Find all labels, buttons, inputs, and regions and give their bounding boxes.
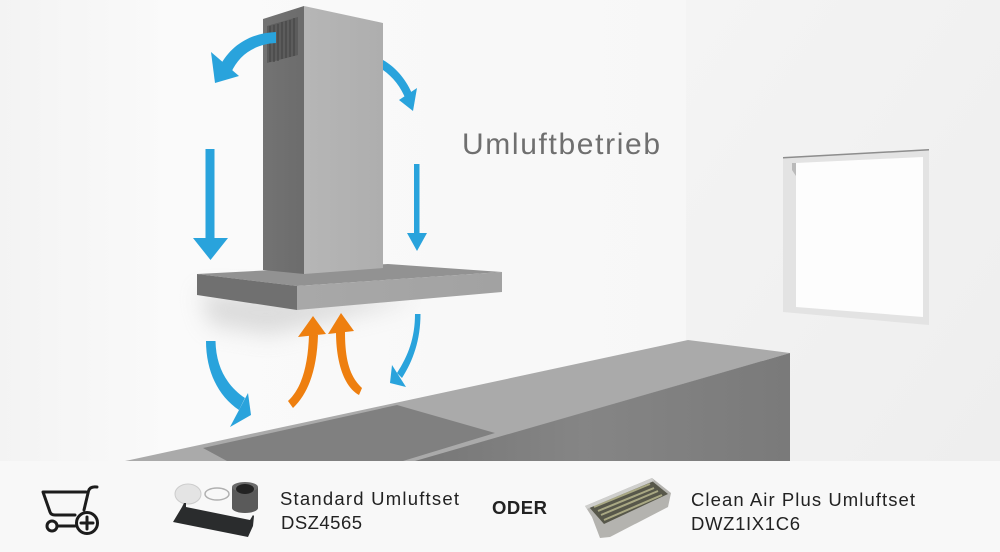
carbon cylinder [232,482,258,513]
chimney vent grille [267,17,298,63]
text: standard set: Standard Umluftset [280,488,459,509]
arrow: blue curved lower right [390,314,420,387]
arrow: blue straight down left [193,149,228,260]
filter lid [175,484,201,504]
arrow: orange left [288,316,326,408]
worktop [125,340,790,461]
shadow under hood [200,292,420,335]
text: oder: ODER [492,497,547,518]
window [783,149,929,325]
text: clean air plus set: Clean Air Plus Umluftset [691,489,915,510]
ring [205,488,229,500]
product image: clean air plus set [585,478,671,538]
text: standard set [280,488,459,533]
text: clean air plus set: DWZ1IX1C6 [691,513,800,534]
background: right wall [686,0,1000,461]
text: clean air plus set [691,489,915,534]
black cover plate [173,503,254,537]
product image: standard set [173,482,258,537]
cooktop [203,405,495,461]
worktop top surface [125,340,790,461]
hood canopy top [197,264,502,286]
arrow: blue straight down right [407,164,427,251]
arrow: blue curved lower left [206,341,251,427]
bottom band [0,461,1000,552]
chimney left face [263,6,304,274]
text: standard set: DSZ4565 [281,512,362,533]
title: Umluftbetrieb [462,128,660,161]
hood left face [197,274,297,310]
arrow: orange right [328,313,362,395]
arrow: blue curved top right [383,60,417,111]
hood right face [297,272,502,310]
icon: shopping cart with plus [43,487,98,534]
cooker hood [197,6,502,310]
worktop front face [415,353,790,461]
arrow: blue curved top left [211,32,276,83]
background: left wall [0,0,686,461]
chimney right face [304,6,383,274]
